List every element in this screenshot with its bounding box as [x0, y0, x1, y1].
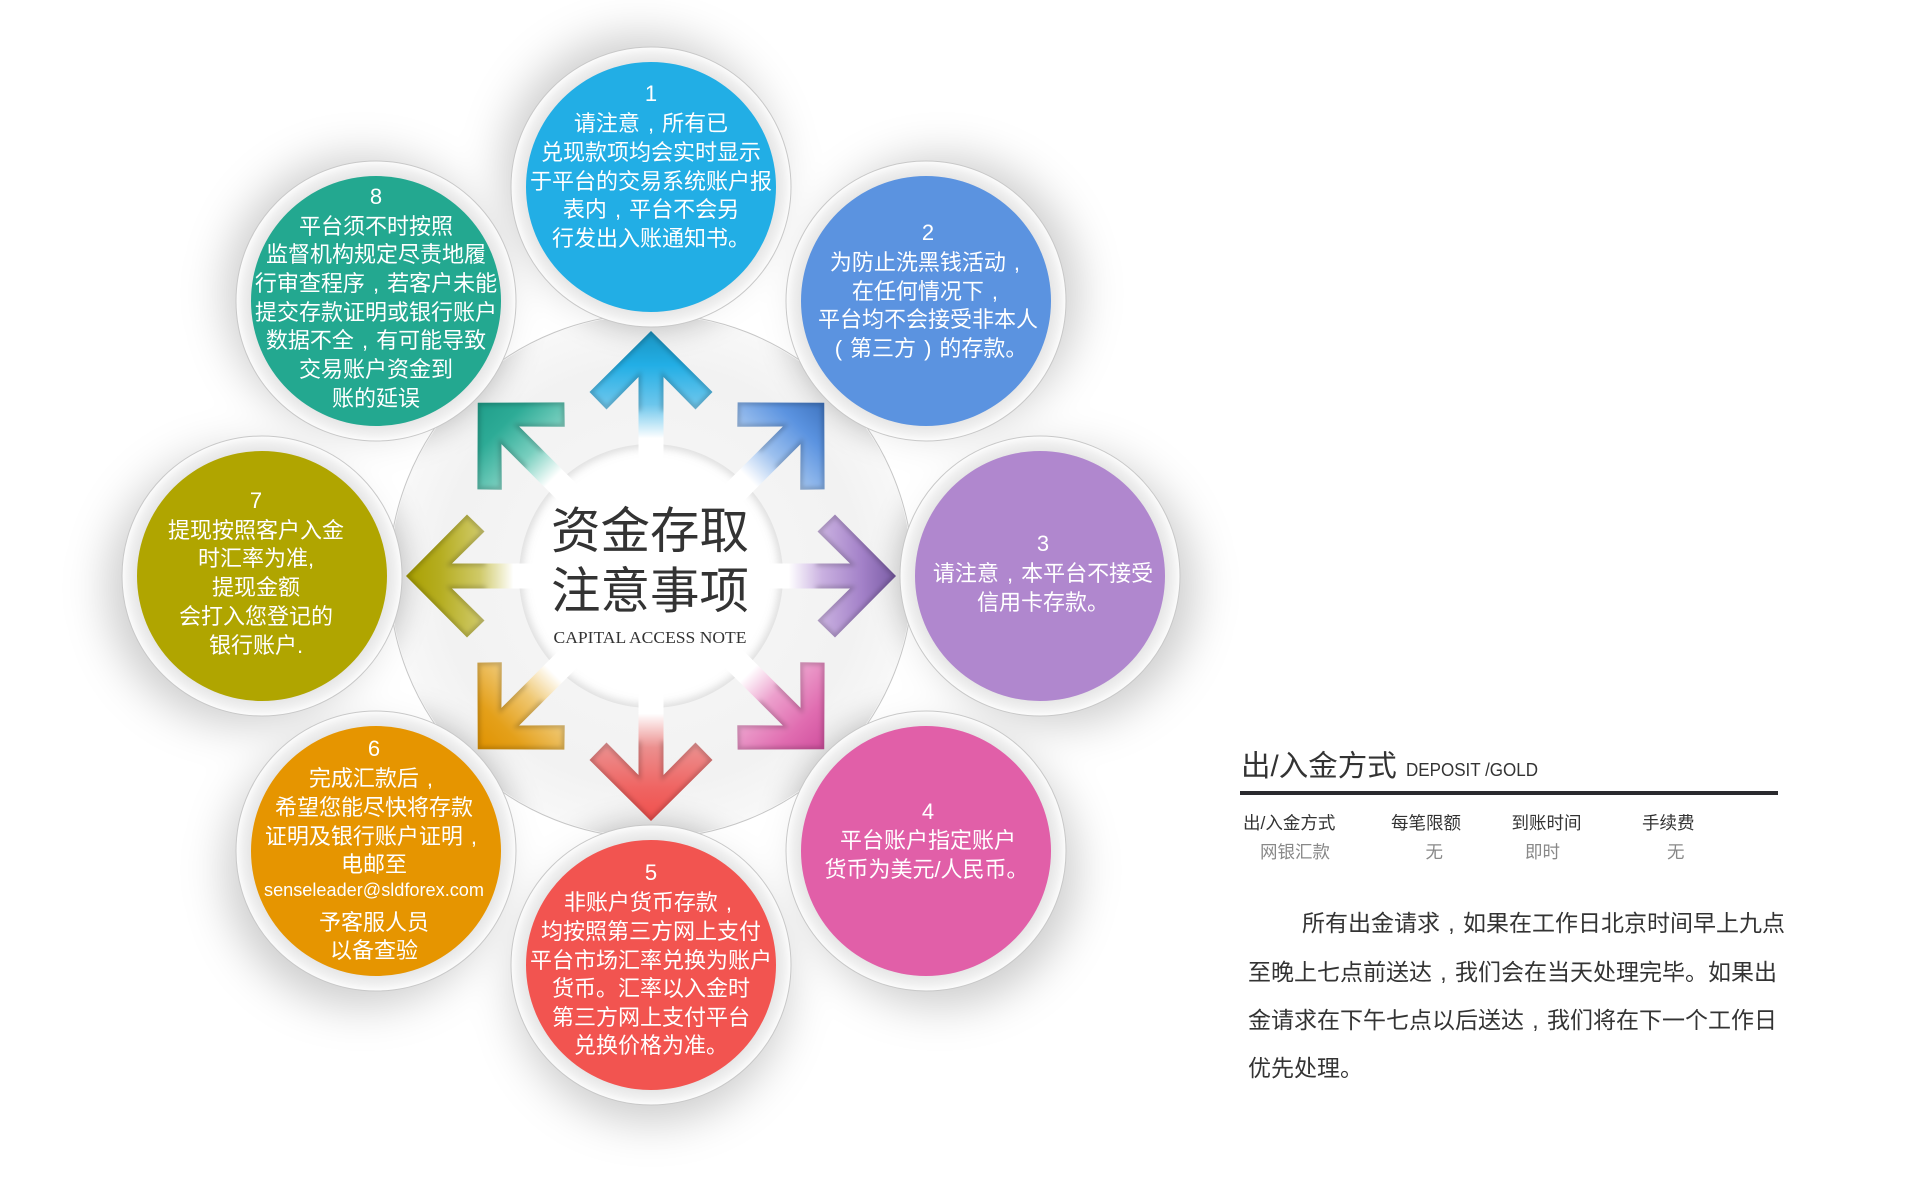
circle 4	[786, 711, 1066, 991]
circle 8: 监督机构规定尽责地履	[266, 242, 486, 267]
circle 6: 完成汇款后 ,	[309, 766, 439, 791]
center title: CAPITAL ACCESS NOTE	[554, 628, 746, 647]
arrow: down left	[477, 656, 572, 750]
circle 2	[786, 161, 1066, 441]
circle 6: 证明及银行账户证明 ,	[265, 824, 483, 849]
circle 1: 请注意 , 所有已	[574, 111, 728, 136]
circle 5: 第三方网上支付平台	[552, 1005, 750, 1030]
circle 6: 以备查验	[330, 938, 418, 963]
arrow: down	[590, 690, 712, 821]
circle 6: 6	[368, 736, 380, 761]
circle 2: 在任何情况下 ,	[852, 279, 1004, 304]
circle 8: 交易账户资金到	[299, 357, 453, 382]
circle drop shadows	[108, 36, 1194, 1122]
arrow: right	[765, 514, 896, 638]
circle 5: 货币。汇率以入金时	[552, 976, 750, 1001]
circle 5: 兑换价格为准。	[574, 1033, 728, 1058]
circle 6: 希望您能尽快将存款	[275, 795, 473, 820]
circle 2: ( 第三方 ) 的存款。	[829, 336, 1027, 361]
circle 6: 予客服人员	[319, 910, 429, 935]
circle 2: 2	[922, 220, 934, 245]
circle 1	[511, 47, 791, 327]
circle 7: 7	[250, 488, 262, 513]
circle 6: 电邮至	[341, 852, 407, 877]
circle 8	[236, 161, 516, 441]
circle 3: 信用卡存款。	[977, 590, 1109, 615]
table value row: 无	[1667, 842, 1684, 862]
center title: 注意事项	[551, 564, 749, 619]
circle 7	[122, 436, 402, 716]
circle 5: 非账户货币存款 ,	[564, 890, 738, 915]
heading rule	[1240, 791, 1778, 795]
arrows ring	[406, 331, 896, 821]
circle 1: 行发出入账通知书。	[552, 226, 750, 251]
panel: deposit method	[1240, 750, 1785, 1081]
circle 1: 兑现款项均会实时显示	[541, 140, 761, 165]
table value row: 网银汇款	[1260, 842, 1330, 862]
circle 1: 表内 , 平台不会另	[563, 197, 739, 222]
circle 8: 平台须不时按照	[299, 214, 453, 239]
note paragraph: 所有出金请求 , 如果在工作日北京时间早上九点	[1302, 910, 1785, 936]
circle 4: 4	[922, 799, 934, 824]
center title	[551, 504, 749, 647]
circle 5: 平台市场汇率兑换为账户	[530, 948, 772, 973]
circle 7: 会打入您登记的	[179, 604, 333, 629]
note paragraph: 金请求在下午七点以后送达 , 我们将在下一个工作日	[1248, 1007, 1777, 1033]
circle 8: 账的延误	[332, 386, 420, 411]
circle 5: 5	[645, 860, 657, 885]
note paragraph	[1248, 910, 1785, 1081]
arrow: up	[590, 331, 712, 462]
circle 7: 提现按照客户入金	[168, 518, 344, 543]
table value row: 即时	[1525, 842, 1560, 862]
circle 5	[511, 825, 791, 1105]
circle 7: 银行账户.	[209, 633, 303, 658]
note paragraph: 至晚上七点前送达 , 我们会在当天处理完毕。如果出	[1248, 959, 1777, 985]
table value row	[1260, 842, 1684, 862]
table header row: 出/入金方式	[1243, 813, 1335, 833]
circle 8: 提交存款证明或银行账户	[255, 300, 497, 325]
circle 4: 平台账户指定账户	[840, 828, 1016, 853]
table header row: 手续费	[1642, 813, 1694, 833]
panel heading: DEPOSIT /GOLD	[1406, 759, 1538, 780]
note paragraph: 优先处理。	[1248, 1055, 1363, 1081]
arrow: up right	[730, 402, 825, 496]
arrow: up left	[477, 402, 572, 496]
arrow: down right	[730, 656, 825, 750]
panel heading	[1241, 750, 1538, 783]
circle 6: senseleader@sldforex.com	[264, 879, 484, 900]
circle 3: 请注意 , 本平台不接受	[933, 561, 1153, 586]
center title: 资金存取	[551, 504, 749, 559]
circle 8: 数据不全 , 有可能导致	[266, 328, 486, 353]
circle 1: 1	[645, 81, 657, 106]
central plate	[393, 318, 909, 834]
circle 5: 均按照第三方网上支付	[541, 919, 761, 944]
table value row: 无	[1426, 842, 1443, 862]
circle 7: 提现金额	[212, 575, 300, 600]
circle 4: 货币为美元/人民币。	[824, 857, 1029, 882]
circle 3	[900, 436, 1180, 716]
table header row: 到账时间	[1512, 813, 1582, 833]
arrow: left	[406, 514, 537, 638]
circle 8: 8	[370, 184, 382, 209]
table header row: 每笔限额	[1391, 813, 1461, 833]
circle 1: 于平台的交易系统账户报	[530, 169, 772, 194]
circle 2: 平台均不会接受非本人	[818, 307, 1038, 332]
circle 2: 为防止洗黑钱活动 ,	[830, 250, 1026, 275]
circle 7: 时汇率为准,	[198, 546, 314, 571]
circle 6	[236, 711, 516, 991]
circle 3: 3	[1037, 531, 1049, 556]
panel heading: 出/入金方式	[1241, 750, 1397, 783]
table header row	[1243, 813, 1694, 833]
circle 8: 行审查程序 , 若客户未能	[255, 271, 497, 296]
